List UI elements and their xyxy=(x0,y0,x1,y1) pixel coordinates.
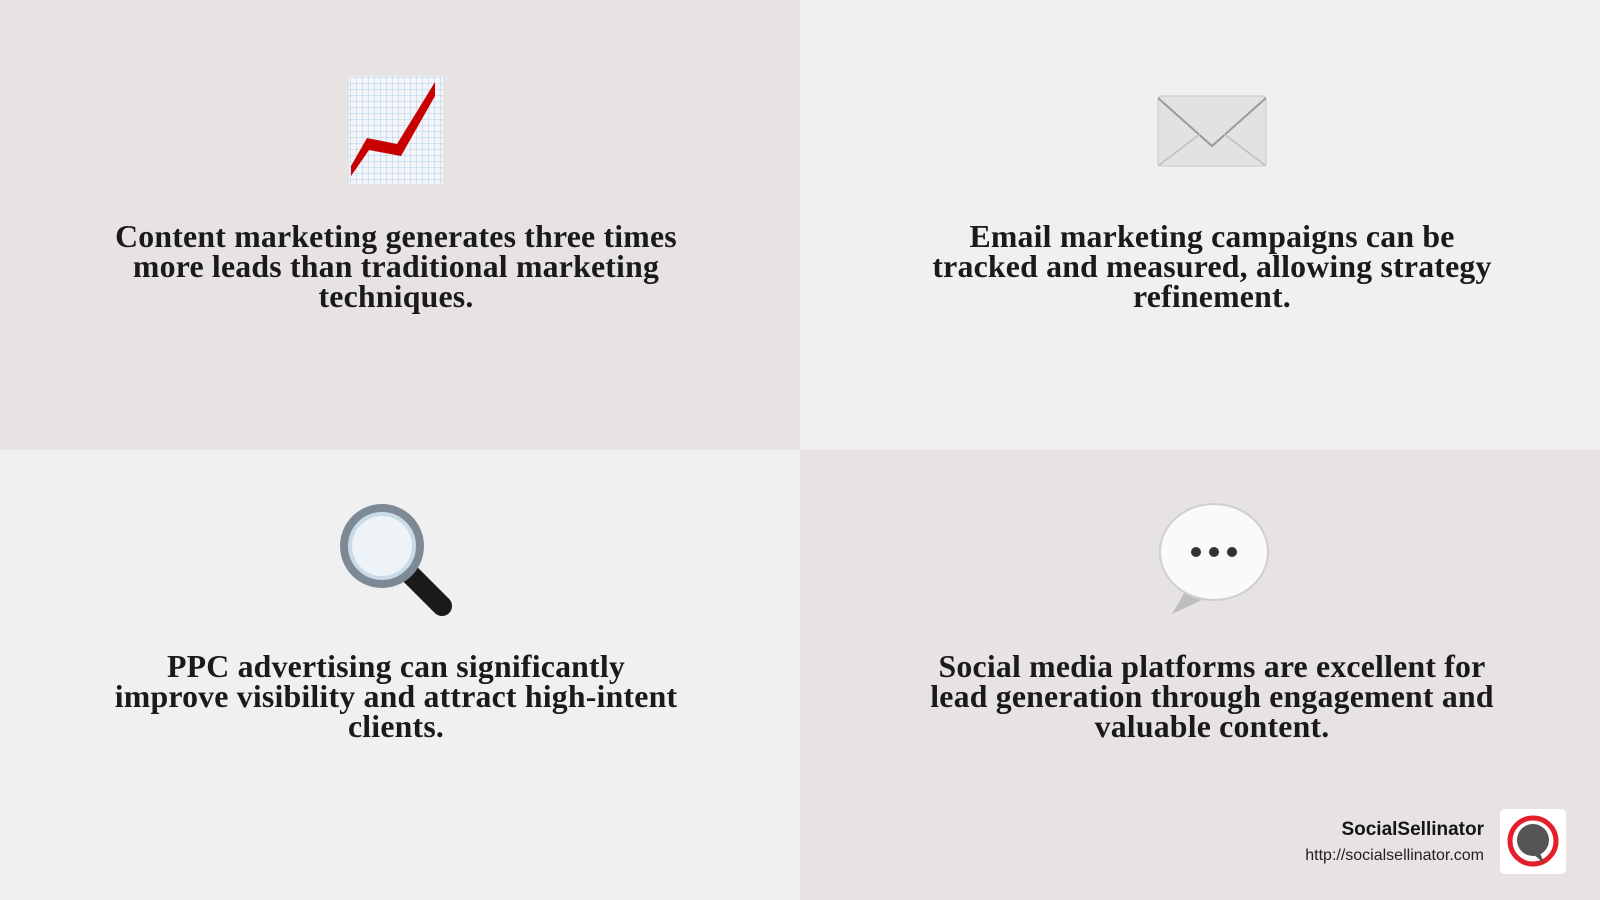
text: social media: lead generation through engagement and xyxy=(930,679,1494,714)
icon: envelope xyxy=(1157,96,1266,166)
icon: chart xyxy=(349,76,443,184)
brand: SocialSellinator: http://socialsellinator.com xyxy=(1305,847,1484,864)
icon: speech bubble xyxy=(1159,503,1269,614)
text: content marketing: Content marketing generates three times xyxy=(115,219,677,254)
text: PPC: clients. xyxy=(348,709,444,744)
text: social media: Social media platforms are excellent for xyxy=(939,649,1485,684)
text: content marketing: more leads than traditional marketing xyxy=(133,249,659,284)
text: PPC xyxy=(115,649,677,744)
logo xyxy=(1500,809,1566,874)
text: content marketing: techniques. xyxy=(318,279,474,314)
panel: content marketing xyxy=(0,0,800,450)
text: PPC: improve visibility and attract high-intent xyxy=(115,679,677,714)
panel: email marketing xyxy=(800,0,1600,450)
brand: SocialSellinator: SocialSellinator xyxy=(1341,819,1484,840)
text: social media: valuable content. xyxy=(1095,709,1329,744)
text: email marketing xyxy=(932,219,1492,314)
text: PPC: PPC advertising can significantly xyxy=(167,649,625,684)
brand: SocialSellinator xyxy=(1305,819,1484,864)
text: email marketing: tracked and measured, allowing strategy xyxy=(932,249,1492,284)
text: email marketing: Email marketing campaigns can be xyxy=(969,219,1455,254)
icon: magnifier xyxy=(340,504,452,616)
text: social media xyxy=(930,649,1494,744)
panel: PPC xyxy=(0,450,800,900)
panel: social media xyxy=(800,450,1600,900)
text: email marketing: refinement. xyxy=(1133,279,1291,314)
text: content marketing xyxy=(115,219,677,314)
